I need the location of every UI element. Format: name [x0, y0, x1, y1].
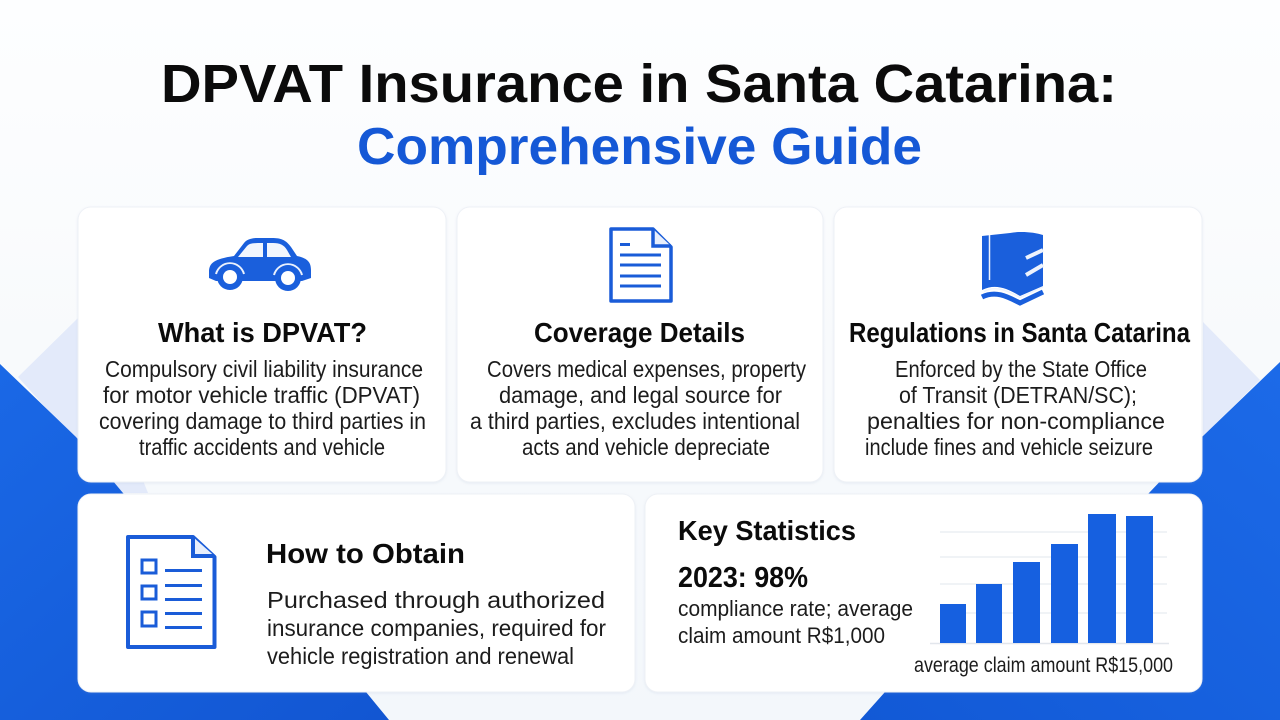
body text: penalties for non-compliance [867, 408, 1165, 434]
body text: include fines and vehicle seizure [865, 434, 1153, 460]
body text [267, 587, 606, 669]
body text: a third parties, excludes intentional [470, 408, 800, 434]
icon: checklist [128, 537, 214, 647]
body text: acts and vehicle depreciate [522, 434, 770, 460]
body text [678, 596, 913, 648]
body text: for motor vehicle traffic (DPVAT) [103, 382, 420, 408]
body text: traffic accidents and vehicle [139, 434, 385, 460]
body text: covering damage to third parties in [99, 408, 426, 434]
title [161, 54, 1117, 176]
body text: compliance rate; average [678, 596, 913, 621]
panel: Regulations in Santa Catarina [834, 207, 1202, 482]
body text [99, 356, 426, 460]
title: DPVAT Insurance in Santa Catarina: [161, 54, 1117, 114]
heading: Regulations in Santa Catarina [849, 317, 1190, 348]
title: Comprehensive Guide [357, 118, 922, 176]
heading: What is DPVAT? [158, 317, 367, 348]
body text [470, 356, 806, 460]
heading: How to Obtain [266, 538, 465, 569]
body text: damage, and legal source for [499, 382, 782, 408]
left corner decoration [0, 318, 389, 720]
chart caption: average claim amount R$15,000 [914, 654, 1173, 677]
body text: of Transit (DETRAN/SC); [899, 382, 1137, 408]
icon: document [611, 229, 671, 301]
icon: car [209, 238, 311, 291]
body text: Purchased through authorized [267, 587, 605, 613]
body text: insurance companies, required for [267, 615, 606, 641]
panel: Coverage Details [457, 207, 823, 482]
panel: What is DPVAT [78, 207, 446, 482]
body text: Compulsory civil liability insurance [105, 356, 423, 382]
panel: How to Obtain [78, 494, 635, 692]
icon: book [982, 232, 1043, 303]
body text: vehicle registration and renewal [267, 643, 574, 669]
heading: Key Statistics [678, 515, 856, 546]
body text: Enforced by the State Office [895, 356, 1147, 382]
body text: Covers medical expenses, property [487, 356, 806, 382]
panel: Key Statistics [645, 494, 1202, 692]
statistic: compliance: 2023: 98% [678, 562, 808, 594]
right corner decoration [860, 322, 1280, 720]
heading: Coverage Details [534, 317, 745, 348]
body text [865, 356, 1165, 460]
body text: claim amount R$1,000 [678, 623, 885, 648]
bar chart [930, 514, 1169, 644]
